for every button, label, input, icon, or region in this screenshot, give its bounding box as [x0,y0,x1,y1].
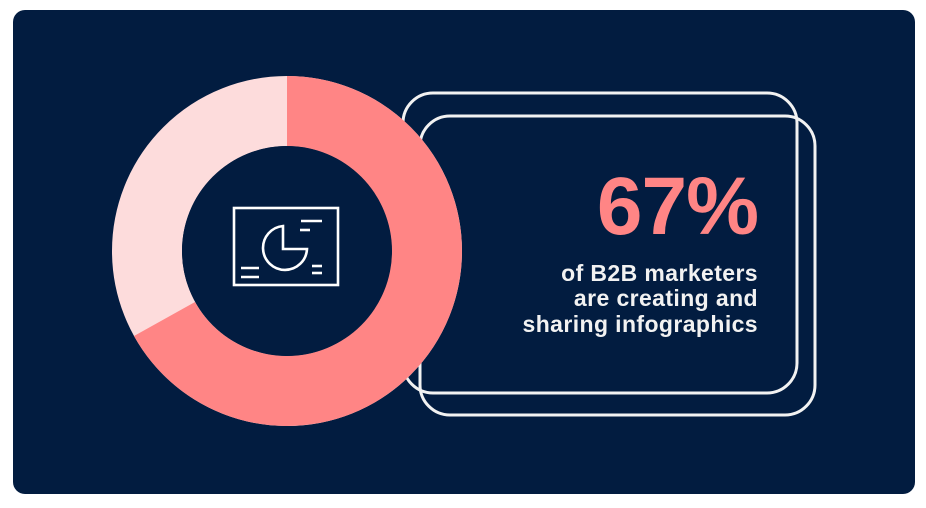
donut chart [134,76,462,426]
outline frames [403,93,815,415]
icon: chart screen [234,208,338,285]
description text: of B2B marketers [561,260,758,286]
description text: sharing infographics [523,311,758,337]
stat: 67%: 67% [597,161,758,252]
description text [523,260,758,337]
description text: are creating and [574,285,758,311]
